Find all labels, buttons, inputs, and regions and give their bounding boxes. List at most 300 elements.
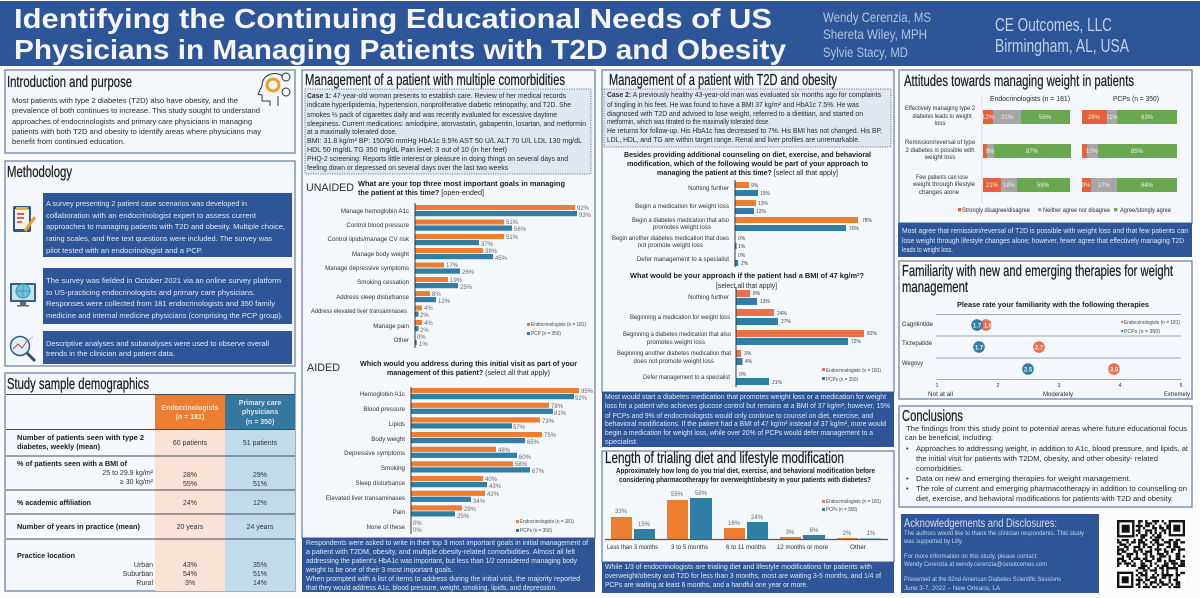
bar chart: aided items: Pain — [393, 509, 406, 516]
takeaway box: T2D and obesity — [602, 392, 894, 447]
icon: magnifier with trend — [10, 336, 35, 361]
intro text: prevalence of both continues to increase. This study sought to understand — [12, 106, 260, 115]
bar chart: approach at BMI 47 — [617, 287, 881, 387]
title: Identifying the Continuing Educational Needs of US — [14, 3, 772, 34]
chart legend — [822, 368, 881, 383]
bar chart: aided items: 29% — [464, 507, 477, 513]
bar chart: approach at BMI 37: Defer management to a specialist — [637, 256, 729, 263]
chart legend — [1121, 320, 1180, 335]
bar chart: approach at BMI 47: 72% — [851, 339, 862, 345]
bar chart: unaided goals: 26% — [462, 270, 475, 276]
demographics table: 54% — [183, 571, 197, 578]
panel: familiarity with therapies — [899, 261, 1192, 399]
bar chart: aided items: 25% — [457, 514, 470, 520]
bar chart: unaided goals: Control blood pressure — [346, 222, 410, 229]
intro text: patients with both T2D and obesity to identify areas where physicians may — [12, 127, 261, 136]
chart legend: PCPs (n = 350) — [826, 377, 858, 383]
conclusions text: • — [906, 444, 909, 453]
authors — [823, 9, 931, 60]
intro text: Most patients with type 2 diabetes (T2D) also have obesity, and the — [12, 96, 238, 105]
bar chart: unaided goals: 2% — [420, 313, 429, 319]
authors: Sylvie Stacy, MD — [823, 44, 908, 60]
bar chart: unaided goals — [311, 203, 592, 348]
demographics table: 24 years — [247, 524, 274, 531]
stacked bars: endocrinologists: 18% — [1003, 183, 1016, 189]
acknowledgements text — [903, 531, 1084, 592]
column chart: trial length: 1% — [867, 531, 876, 537]
row labels: Few patients can lose — [916, 174, 968, 181]
takeaway box: T2D and obesity: loss for a patient who achieves glucose control but remains at a BMI of 37 kg/m²; however, 15% — [605, 401, 890, 410]
chart legend — [527, 322, 586, 337]
dot plot: familiarity ratings: Extremely — [1164, 392, 1190, 398]
authors: Wendy Cerenzia, MS — [823, 9, 931, 25]
takeaway box: trial length: overweight/obesity and T2D for less than 3 months, most are waiting 3-5 months, and 1/4 of — [605, 571, 882, 580]
takeaway box: trial length: While 1/3 of endocrinologists are trialing diet and lifestyle modifications for patients with — [605, 562, 872, 571]
demographics table — [6, 394, 295, 591]
dot plot: familiarity ratings: Moderately — [1043, 392, 1073, 398]
affiliation — [995, 15, 1129, 56]
stacked bars: endocrinologists: 87% — [1026, 149, 1039, 155]
bar chart: unaided goals: 25% — [460, 285, 473, 291]
bar chart: unaided goals: 1% — [419, 342, 428, 348]
demographics table: 3% — [185, 580, 195, 587]
question 1: Besides providing additional counseling on diet, exercise, and behavioral — [624, 150, 871, 159]
bar chart: approach at BMI 37: promotes weight loss — [653, 224, 711, 231]
question: Please rate your familiarity with the following therapies — [957, 300, 1149, 309]
icon: checklist — [13, 206, 35, 232]
bar chart: unaided goals: 4% — [424, 306, 433, 312]
bar chart: approach at BMI 47: promotes weight loss — [647, 339, 705, 346]
bar chart: aided items: Hemoglobin A1c — [360, 391, 405, 398]
bar chart: unaided goals: Manage hemoglobin A1c — [341, 208, 409, 215]
method box 2: medicine and internal medicine physicians (comprising the PCP group). — [46, 311, 283, 320]
stacked bars: endocrinologists: 59% — [1037, 183, 1050, 189]
row labels: Remission/reversal of type — [905, 139, 976, 146]
method box 1: pilot tested with an endocrinologist and a PCP. — [46, 246, 203, 255]
bar chart: unaided goals: 8% — [432, 292, 441, 298]
bar chart: approach at BMI 37: 78% — [862, 218, 873, 224]
chart legend: Endocrinologists (n = 181) — [531, 322, 586, 328]
conclusions text: The role of current and emerging pharmacotherapy in addition to counselling on — [916, 484, 1187, 493]
demographics table: 35% — [253, 562, 267, 569]
conclusions text: diet, exercise, and behavioral modifications for patients with T2D and obesity. — [916, 494, 1173, 503]
takeaway box: comorbidities: that they would address A1c, blood pressure, weight, smoking, lipids, and depression. — [306, 583, 557, 592]
takeaway box: T2D and obesity: of PCPs and 9% of endocrinologists would only continue to counsel on diet, exercise, and — [605, 411, 873, 420]
heading: conclusions: Conclusions — [902, 408, 963, 425]
bar chart: approach at BMI 37: not promote weight loss — [638, 242, 703, 249]
bar chart: aided items: Depressive symptoms — [344, 450, 405, 457]
method box 2: to US-practicing endocrinologists and primary care physicians. — [46, 288, 255, 297]
bar chart: approach at BMI 47: Beginning a medication for weight loss — [630, 314, 730, 321]
row labels: changes alone — [919, 189, 960, 196]
bar chart: unaided goals: 92% — [577, 206, 590, 212]
bar chart: approach at BMI 47: Beginning a diabetes medication that also — [623, 331, 732, 338]
case 2 box: He returns for follow-up. His HbA1c has decreased to 7%. His BMI has not changed. His BP, — [607, 126, 882, 135]
case 1 box: smokes ½ pack of cigarettes daily and was recently evaluated for excessive daytime — [307, 110, 557, 119]
aided question — [360, 359, 577, 377]
bar chart: unaided goals: 93% — [579, 213, 592, 219]
case 2 box — [604, 89, 891, 147]
chart legend: Endocrinologists (n = 181) — [1124, 320, 1180, 326]
question 2: [select all that apply] — [716, 281, 777, 290]
column chart: trial length: 15% — [638, 522, 651, 528]
bar chart: approach at BMI 47: Defer management to a specialist — [643, 374, 730, 381]
bar chart: aided items: 57% — [513, 425, 526, 431]
bar chart: approach at BMI 37: 12% — [756, 209, 767, 215]
panel: conclusions — [899, 406, 1192, 507]
intro text: approaches of endocrinologists and primary care physicians in managing — [12, 117, 252, 126]
demographics table: Number of patients seen with type 2 — [17, 433, 144, 442]
demographics table: (n = 181) — [176, 414, 204, 421]
bar chart: aided items: 42% — [487, 492, 500, 498]
takeaway box: attitudes — [898, 223, 1192, 257]
stacked bars: PCPs: 27% — [1098, 183, 1111, 189]
bar chart: aided items: Elevated liver transaminases — [326, 495, 405, 502]
bar chart: unaided goals: 4% — [424, 321, 433, 327]
bar chart: aided items: 48% — [498, 448, 511, 454]
case 1 box: feeling down or depressed on several days over the last two weeks — [307, 163, 508, 172]
bar chart: approach at BMI 37: Nothing further — [688, 185, 729, 192]
bar chart: aided items: Blood pressure — [363, 406, 406, 413]
takeaway box: trial length: PCPs are waiting at least 6 months, and a handful one year or more. — [605, 580, 808, 589]
bar chart: unaided goals: 56% — [514, 227, 527, 233]
chart legend: PCPs (n = 350) — [826, 507, 857, 513]
unaided question: What are your top three most important goals in managing — [358, 179, 565, 188]
acknowledgements text: June 3-7, 2022 – New Orleans, LA — [904, 586, 1000, 592]
stacked bars: endocrinologists — [982, 110, 1071, 192]
bar chart: approach at BMI 37 — [612, 180, 873, 267]
column chart: trial length: 6% — [810, 528, 819, 534]
dot plot: familiarity ratings: 4 — [1119, 383, 1122, 389]
bar chart: approach at BMI 47: 27% — [781, 319, 792, 325]
chart legend: PCP (n = 350) — [531, 331, 561, 337]
demographics table: % academic affiliation — [17, 498, 91, 507]
bar chart: approach at BMI 37: 1% — [738, 244, 746, 250]
takeaway box: comorbidities — [302, 538, 595, 592]
stacked bars: endocrinologists: 31% — [1001, 115, 1014, 121]
chart legend: PCPs (n = 350) — [1124, 329, 1160, 335]
heading: familiarity — [902, 263, 1173, 296]
dot plot: familiarity ratings: Cagrilintide — [902, 321, 934, 328]
aided heading: AIDED — [307, 362, 340, 374]
stacked bars: PCPs: 11% — [1106, 115, 1118, 121]
takeaway box: comorbidities: a patient with T2DM, obesity, and multiple obesity-related comorbidities. Almost all felt — [306, 547, 575, 556]
column chart: trial length: 33% — [615, 509, 628, 515]
conclusions text: The findings from this study point to potential areas where future educational focus — [906, 424, 1187, 433]
demographics table: 20 years — [177, 524, 204, 531]
bar chart: unaided goals: Smoking cessation — [357, 279, 410, 286]
demographics table: ≥ 30 kg/m² — [120, 479, 154, 486]
column chart: trial length: 6 to 11 months — [726, 544, 766, 551]
bar chart: unaided goals: Address elevated liver transaminases — [311, 308, 407, 315]
case 1 box: sleepiness. Current medications: amlodipine, atorvastatin, gabapentin, losartan, and metformin — [307, 119, 586, 128]
bar chart: unaided goals: 51% — [506, 220, 519, 226]
heading: methodology: Methodology — [7, 164, 72, 181]
acknowledgements text: Wendy Cerenzia at wendy.cerenzia@ceoutcomes.com — [904, 562, 1047, 568]
row labels: weight through lifestyle — [912, 181, 976, 188]
bar chart: approach at BMI 47: 3% — [744, 351, 752, 357]
demographics table: (n = 350) — [246, 419, 274, 426]
bar chart: aided items: 58% — [515, 462, 528, 468]
method box 2: Responses were collected from 181 endocrinologists and 350 family — [46, 299, 275, 308]
bar chart: aided items: 78% — [551, 404, 564, 410]
demographics table: Endocrinologists — [161, 405, 219, 412]
unaided question: the patient at this time? [open-ended] — [358, 188, 484, 197]
bar chart: approach at BMI 37: Begin a medication for weight loss — [635, 203, 729, 210]
panel: introduction and purpose — [5, 70, 295, 153]
demographics table: 14% — [253, 580, 267, 587]
acknowledgements text: The authors would like to thank the clinician respondents. This study — [904, 531, 1084, 537]
bar chart: unaided goals: 51% — [506, 235, 519, 241]
method box 3: Descriptive analyses and subanalyses were used to observe overall — [46, 339, 269, 348]
dot plot: familiarity ratings: 3.9 — [1110, 367, 1119, 373]
demographics table: diabetes, weekly (mean) — [17, 442, 101, 451]
heading: familiarity: management — [902, 279, 968, 296]
bar chart: aided items: Lipids — [389, 421, 405, 428]
heading: introduction: Introduction and purpose — [7, 74, 132, 91]
stacked bars: endocrinologists: 56% — [1039, 115, 1052, 121]
bar chart: approach at BMI 37: 2% — [741, 261, 749, 267]
column chart: trial length — [605, 491, 888, 551]
column headers — [990, 94, 1159, 103]
bar chart: approach at BMI 37: Begin another diabetes medication that does — [612, 235, 729, 242]
dot plot: familiarity ratings: Not at all — [928, 392, 953, 398]
title: Physicians in Managing Patients with T2D and Obesity — [14, 34, 786, 65]
takeaway box: comorbidities: Respondents were asked to write in their top 3 most important goals in initial management of — [306, 538, 589, 547]
dot plot: familiarity ratings: 1.8 — [984, 323, 993, 329]
question — [616, 466, 875, 484]
bar chart: unaided goals: 17% — [446, 263, 459, 269]
row labels: weight loss — [924, 154, 955, 161]
column chart: trial length: 24% — [751, 515, 764, 521]
dot plot: familiarity ratings: 2 — [997, 383, 1000, 389]
dot plot: familiarity ratings: 1.7 — [975, 345, 984, 351]
case 1 box: Case 1: 47-year-old woman presents to establish care. Review of her medical records — [307, 91, 566, 100]
bar chart: aided items: 73% — [542, 419, 555, 425]
case 2 box: metformin, which was titrated to the maximally tolerated dose. — [607, 117, 770, 126]
chart legend — [516, 519, 574, 534]
acknowledgements text: was supported by Lilly. — [903, 539, 963, 545]
stacked bars: PCPs: 85% — [1131, 149, 1144, 155]
dot plot: familiarity ratings: 2.7 — [1035, 345, 1044, 351]
conclusions text: can be beneficial, including: — [905, 433, 993, 442]
bar chart: approach at BMI 47: 24% — [777, 311, 788, 317]
bar chart: aided items: None of these — [366, 524, 406, 531]
demographics table: Number of years in practice (mean) — [17, 522, 141, 531]
title — [14, 3, 786, 65]
column chart: trial length: Less than 3 months — [607, 544, 658, 551]
demographics table: 60 patients — [173, 440, 208, 447]
case 2 box: of tingling in his feet. He was found to have a BMI 37 kg/m² and HbA1c 7.5%. He was — [607, 100, 859, 109]
row labels — [905, 105, 976, 196]
bar chart: approach at BMI 47: Nothing further — [688, 294, 729, 301]
affiliation: Birmingham, AL, USA — [995, 36, 1129, 56]
heading: length of trialing: Length of trialing diet and lifestyle modification — [605, 450, 844, 467]
column chart: trial length: 3 to 5 months — [671, 544, 708, 551]
heading: demographics: Study sample demographics — [7, 376, 149, 393]
bar chart: approach at BMI 47: Beginning another diabetes medication that — [617, 350, 731, 357]
bar chart: unaided goals: 2% — [420, 328, 429, 334]
bar chart: aided items: 0% — [413, 528, 422, 534]
chart legend — [822, 499, 881, 513]
bar chart: aided items: Smoking — [381, 465, 406, 472]
demographics table: Suburban — [123, 571, 153, 578]
conclusions text: • — [906, 474, 909, 483]
bar chart: unaided goals: Manage pain — [373, 323, 410, 330]
row labels: loss — [934, 120, 946, 127]
bar chart: approach at BMI 37: 0% — [738, 253, 746, 259]
bar chart: aided items: 75% — [544, 433, 557, 439]
method box 3 — [43, 331, 292, 364]
case 1 box — [305, 89, 591, 174]
dot plot: familiarity ratings: 5 — [1180, 383, 1183, 389]
header banner — [0, 1, 1200, 66]
case 2 box: Case 2: A previously healthy 43-year-old man was evaluated six months ago for complaints — [607, 90, 881, 99]
demographics table: 51% — [253, 481, 267, 488]
attitudes legend: Strongly disagree/disagree — [962, 207, 1030, 214]
bar chart: approach at BMI 37: 15% — [760, 191, 771, 197]
bar chart: approach at BMI 37: Begin a diabetes medication that also — [632, 217, 730, 224]
bar chart: unaided goals: 19% — [450, 278, 463, 284]
takeaway box: T2D and obesity: Most would start a diabetes medication that promotes weight loss or a medication for weight — [605, 392, 886, 401]
demographics table: 51% — [253, 571, 267, 578]
demographics table: Primary care — [239, 400, 281, 407]
row labels: 2 diabetes is possible with — [906, 147, 975, 154]
demographics table: 25 to 29.9 kg/m² — [102, 470, 154, 477]
demographics table: 28% — [183, 472, 197, 479]
method box 1: collaboration with an endocrinologist expert to assess current — [46, 211, 256, 220]
stacked bars: PCPs: 10% — [1086, 149, 1099, 155]
chart legend: Endocrinologists (n = 181) — [826, 499, 881, 505]
stacked bars: PCPs: 63% — [1141, 115, 1154, 121]
intro text — [12, 96, 261, 146]
aided question: Which would you address during this initial visit as part of your — [360, 359, 577, 368]
method box 1: A survey presenting 2 patient case scenarios was developed in — [46, 199, 247, 208]
bar chart: aided items: Body weight — [371, 436, 405, 443]
aided question: management of this patient? (select all that apply) — [387, 368, 550, 377]
demographics table: % of patients seen with a BMI of — [17, 459, 128, 468]
takeaway box: T2D and obesity: behavioral modifications. If the patient had a BMI of 47 kg/m² instead of 37 kg/m², more would — [605, 419, 886, 428]
column chart: trial length: 55% — [671, 492, 684, 498]
case 1 box: HDL 50 mg/dL TG 350 mg/dL Pain level: 3 out of 10 (in her feet) — [307, 145, 507, 154]
heading: T2D and obesity: Management of a patient with T2D and obesity — [609, 72, 837, 89]
bar chart: unaided goals: Address sleep disturbance — [336, 294, 410, 301]
panel: methodology — [5, 161, 295, 366]
bar chart: approach at BMI 47: 82% — [867, 331, 878, 337]
QR code — [1117, 520, 1185, 588]
demographics table: 43% — [183, 562, 197, 569]
case 2 box: LDL, HDL, and TG are within target range. Renal and liver profiles are unremarkable. — [607, 135, 860, 144]
conclusions text: Data on new and emerging therapies for weight management. — [916, 474, 1131, 483]
dot plot: familiarity ratings: Wegovy — [902, 360, 924, 367]
column chart: trial length: 2% — [843, 531, 852, 537]
conclusions text: comorbidities. — [916, 464, 963, 473]
icon: head with gears — [258, 73, 290, 106]
question 1: modification, which of the following would be part of your approach to — [627, 159, 869, 168]
unaided question — [358, 179, 565, 197]
takeaway box: attitudes: leads to weight loss. — [902, 245, 953, 254]
method box 3: trends in the clinician and patient data. — [46, 349, 175, 358]
stacked bars: endocrinologists: 12% — [982, 115, 995, 121]
dot plot: familiarity ratings: 1.7 — [973, 323, 982, 329]
case 1 box: at a maximally tolerated dose. — [307, 127, 397, 136]
column chart: trial length: 3% — [786, 530, 795, 536]
bar chart: unaided goals: 0% — [417, 335, 426, 341]
bar chart: approach at BMI 37: 13% — [758, 201, 769, 207]
bar chart: approach at BMI 47: 8% — [753, 291, 761, 297]
bar chart: unaided goals: Control lipids/manage CV risk — [327, 236, 410, 243]
takeaway box: T2D and obesity: begin a medication for weight loss, while over 20% of PCPs would defer management to a — [605, 428, 874, 437]
row labels: Effectively managing type 2 — [905, 105, 976, 112]
panel: patient with multiple comorbidities — [302, 70, 595, 538]
affiliation: CE Outcomes, LLC — [995, 15, 1112, 35]
panel: patient with T2D and obesity — [602, 70, 894, 392]
bar chart: approach at BMI 37: 70% — [849, 226, 860, 232]
takeaway box: trial length — [602, 562, 894, 593]
bar chart: unaided goals: Manage body weight — [352, 251, 409, 258]
stacked bars: endocrinologists: 9% — [986, 149, 995, 155]
dot plot: familiarity ratings: 2.5 — [1024, 367, 1033, 373]
dot plot: familiarity ratings: Tirzepatide — [902, 340, 933, 347]
bar chart: aided items: 60% — [519, 455, 532, 461]
panel: acknowledgements and disclosures — [901, 514, 1099, 593]
question: Approximately how long do you trial diet, exercise, and behavioral modification before — [616, 466, 875, 475]
bar chart: aided items: 67% — [532, 469, 545, 475]
attitudes legend — [958, 207, 1171, 214]
dot plot: familiarity ratings: 3 — [1058, 383, 1061, 389]
bar chart: aided items: 43% — [489, 484, 502, 490]
demographics table: 29% — [253, 472, 267, 479]
chart legend: Endocrinologists (n = 181) — [826, 368, 881, 374]
case 1 box: indicate hyperlipidemia, hypertension, nonproliferative diabetic retinopathy, and T2D. She — [307, 100, 571, 109]
column chart: trial length: 16% — [728, 521, 741, 527]
method box 1 — [43, 193, 292, 257]
bar chart: unaided goals: 12% — [438, 299, 451, 305]
column chart: trial length: Other — [850, 544, 866, 551]
demographics table: Urban — [134, 562, 153, 569]
stacked bars: PCPs: 64% — [1141, 183, 1154, 189]
method box 1: approaches to managing patients with T2D and obesity. Multiple choice, — [46, 222, 285, 231]
question: considering pharmacotherapy for overweight/obesity in your patients with diabetes? — [619, 475, 871, 484]
method box 2: The survey was fielded in October 2021 via an online survey platform — [46, 276, 281, 285]
bar chart: aided items: 40% — [485, 477, 498, 483]
dot plot: familiarity ratings — [902, 314, 1190, 398]
case 2 box: diagnosed with T2D and advised to lose weight, referred to a dietitian, and started on — [607, 109, 863, 118]
method box 2 — [43, 268, 292, 324]
column headers: PCPs (n = 350) — [1113, 94, 1159, 103]
demographics table: Practice location — [17, 551, 75, 560]
heading: multiple comorbidities: Management of a patient with multiple comorbidities — [305, 72, 565, 89]
bar chart: unaided goals: Other — [394, 337, 409, 344]
question 1 — [624, 150, 871, 177]
stacked bars: PCPs: 9% — [1082, 183, 1091, 189]
acknowledgements text: For more information on this study, please contact: — [904, 554, 1038, 560]
bar chart: aided items: Sleep disturbance — [355, 480, 406, 487]
bar chart: unaided goals: 45% — [495, 256, 508, 262]
demographics table: 51 patients — [243, 440, 278, 447]
attitudes legend: Agree/stongly agree — [1120, 207, 1171, 214]
takeaway box: comorbidities: addressing the patient's HbA1c was important, but less than 1/2 considered managing body — [306, 556, 577, 565]
heading: acknowledgements: Acknowledgements and Disclosures: — [904, 516, 1057, 530]
stacked bars: PCPs — [1082, 110, 1177, 192]
demographics table: physicians — [242, 409, 278, 416]
demographics table: 12% — [253, 500, 267, 507]
authors: Shereta Wiley, MPH — [823, 26, 927, 42]
bar chart: approach at BMI 37: 0% — [738, 236, 746, 242]
bar chart: approach at BMI 47: 13% — [760, 299, 771, 305]
bar chart: aided items: 65% — [527, 440, 540, 446]
bar chart: aided items: 34% — [473, 499, 486, 505]
